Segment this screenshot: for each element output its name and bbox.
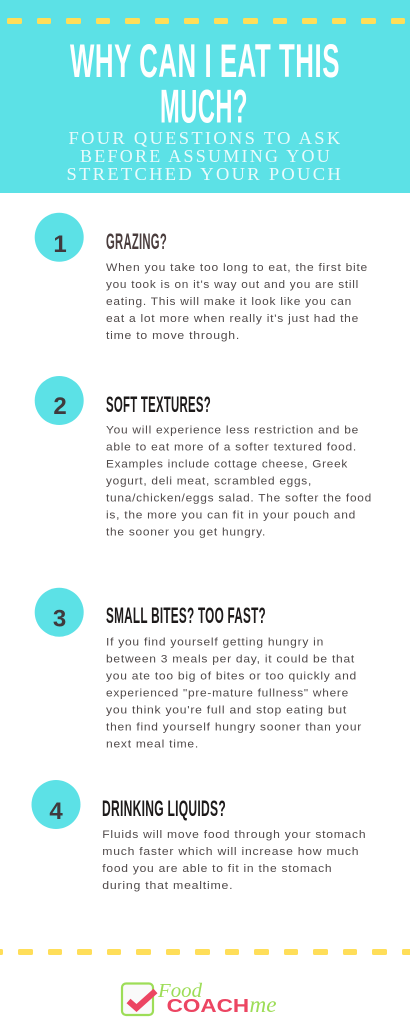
body text 1	[106, 262, 368, 342]
heading 3: SMALL BITES? TOO FAST?	[106, 603, 266, 628]
number badge 1	[35, 213, 84, 262]
body text 2: able to eat more of a softer textured food.	[106, 442, 357, 454]
body text 4	[102, 829, 366, 892]
body text 3: you ate too big of bites or too quickly and	[106, 670, 357, 682]
body text 4: food you are able to fit in the stomach	[102, 863, 332, 875]
body text 2: yogurt, deli meat, scrambled eggs,	[106, 476, 312, 488]
body text 3: then find yourself hungry sooner than your	[106, 722, 362, 734]
subtitle	[66, 128, 343, 184]
bottom dashed divider	[0, 949, 410, 955]
icon: checkbox with check mark	[122, 984, 156, 1015]
body text 3: next meal time.	[106, 738, 199, 750]
body text 1: you took is on it's way out and you are still	[106, 279, 359, 291]
number badge 1: 1	[53, 231, 67, 258]
logo wordmark: me	[250, 992, 276, 1017]
body text 1: eat a lot more when really it's just had the	[106, 313, 359, 325]
body text 3: you think you're full and stop eating but	[106, 704, 347, 716]
body text 2: the sooner you get hungry.	[106, 526, 266, 538]
body text 2: is, the more you can fit in your pouch and	[106, 510, 356, 522]
number badge 4	[32, 780, 80, 829]
logo wordmark: Food	[157, 980, 203, 1002]
number badge 3	[35, 588, 84, 637]
body text 3: between 3 meals per day, it could be that	[106, 654, 355, 666]
heading 1: GRAZING?	[106, 229, 167, 254]
section 1: grazing	[35, 213, 368, 342]
body text 3: experienced "pre-mature fullness" where	[106, 688, 349, 700]
heading 4: DRINKING LIQUIDS?	[102, 796, 226, 821]
body text 4: during that mealtime.	[102, 880, 233, 892]
subtitle: STRETCHED YOUR POUCH	[66, 164, 343, 184]
body text 2	[106, 424, 372, 538]
subtitle: BEFORE ASSUMING YOU	[80, 146, 332, 166]
body text 1: When you take too long to eat, the first bite	[106, 262, 368, 274]
number badge 2	[35, 376, 84, 425]
number badge 3: 3	[53, 606, 66, 632]
body text 3: If you find yourself getting hungry in	[106, 636, 324, 648]
body text 4: much faster which will increase how much	[102, 846, 359, 858]
heading 2: SOFT TEXTURES?	[106, 392, 211, 417]
subtitle: FOUR QUESTIONS TO ASK	[68, 128, 342, 148]
body text 1: time to move through.	[106, 330, 240, 342]
body text 2: tuna/chicken/eggs salad. The softer the food	[106, 492, 372, 504]
body text 1: eating. This will make it look like you can	[106, 296, 352, 308]
title: MUCH?	[160, 80, 248, 132]
body text 3	[106, 636, 362, 750]
body text 2: Examples include cottage cheese, Greek	[106, 458, 348, 470]
logo wordmark: COACH	[167, 995, 249, 1016]
section 2: soft textures	[35, 376, 372, 538]
logo wordmark	[157, 980, 276, 1017]
number badge 4: 4	[49, 798, 63, 825]
header band	[0, 0, 410, 193]
section 3: small bites	[35, 588, 362, 750]
body text 4: Fluids will move food through your stomach	[102, 829, 366, 841]
body text 2: You will experience less restriction and be	[106, 424, 359, 436]
title	[70, 34, 340, 132]
section 4: drinking liquids	[32, 780, 366, 892]
logo: Food Coach me	[122, 980, 276, 1017]
number badge 2: 2	[53, 393, 67, 420]
